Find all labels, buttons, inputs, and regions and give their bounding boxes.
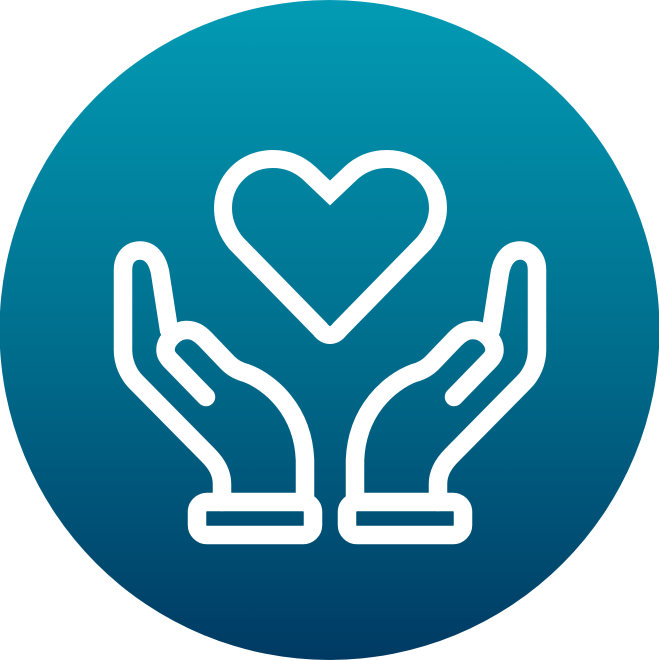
right hand outline bbox=[438, 250, 537, 502]
left hand outline bbox=[123, 250, 222, 502]
icon: left hand bbox=[123, 250, 313, 535]
left hand index finger bbox=[166, 330, 305, 502]
right hand index finger bbox=[355, 330, 494, 502]
right cuff bbox=[347, 502, 463, 535]
icon: heart bbox=[223, 159, 438, 335]
icon: right hand bbox=[347, 250, 537, 535]
left cuff bbox=[197, 502, 313, 535]
